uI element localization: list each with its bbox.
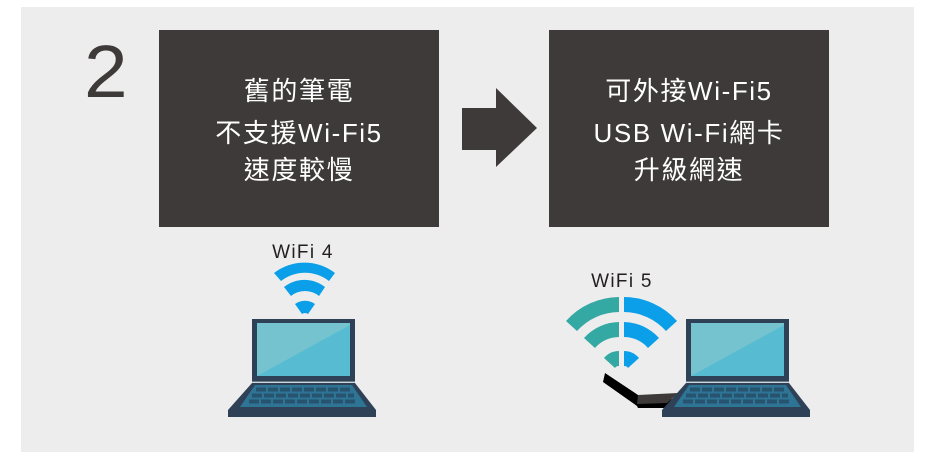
- icon: wifi 4 signal: [274, 263, 335, 314]
- panel: upgrade text: USB Wi-Fi網卡: [594, 118, 784, 148]
- icon: laptop right: [662, 319, 810, 417]
- step number: 2: [84, 30, 128, 113]
- arrow: [462, 88, 537, 167]
- panel: upgrade text: [549, 30, 829, 227]
- icon: laptop left: [228, 319, 376, 417]
- label: WiFi 4: WiFi 4: [272, 242, 334, 263]
- panel: upgrade text: 可外接Wi-Fi5: [605, 76, 773, 106]
- panel: old laptop text: [159, 30, 439, 227]
- icon: wifi 5 signal: [566, 297, 677, 368]
- label: WiFi 5: WiFi 5: [591, 271, 653, 292]
- panel: old laptop text: 不支援Wi-Fi5: [215, 118, 383, 148]
- panel: upgrade text: 升級網速: [634, 155, 744, 185]
- panel: old laptop text: 舊的筆電: [244, 76, 354, 106]
- panel: old laptop text: 速度較慢: [244, 155, 354, 185]
- icon: USB dongle: [603, 373, 678, 408]
